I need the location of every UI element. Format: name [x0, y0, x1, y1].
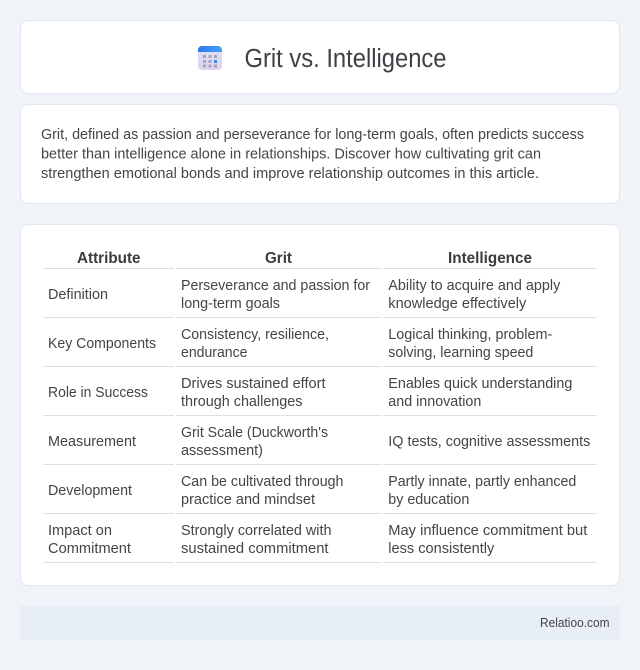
row: Impact on Commitment: less consistently [388, 541, 495, 557]
row: Impact on Commitment [43, 523, 597, 563]
row: Role in Success: and innovation [388, 394, 481, 410]
row: Development [43, 474, 597, 514]
panel: description card [20, 104, 620, 204]
row: Definition: Definition [48, 287, 108, 303]
row: Key Components: Key Components [48, 336, 156, 352]
panel: header card [20, 20, 620, 94]
row: Measurement: IQ tests, cognitive assessments [388, 434, 590, 450]
row: Development: by education [388, 492, 469, 508]
table header row [43, 250, 597, 269]
row: Role in Success: through challenges [181, 394, 302, 410]
row: Measurement: Measurement [48, 434, 136, 450]
row: Impact on Commitment: sustained commitment [181, 541, 328, 557]
row: Development: Partly innate, partly enhanced [388, 474, 576, 490]
row: Impact on Commitment: Commitment [48, 541, 131, 557]
row: Measurement: assessment) [181, 443, 263, 459]
icon: calendar [198, 46, 222, 70]
row: Role in Success: Drives sustained effort [181, 376, 326, 392]
row: Measurement [43, 425, 597, 465]
row: Development: Can be cultivated through [181, 474, 344, 490]
row: Role in Success [43, 376, 597, 416]
row: Definition: Perseverance and passion for [181, 278, 370, 294]
row: Definition: knowledge effectively [388, 296, 527, 312]
table header row: Attribute [77, 250, 141, 267]
row: Key Components: solving, learning speed [388, 345, 533, 361]
row: Key Components: Logical thinking, problem- [388, 327, 553, 343]
description text: better than intelligence alone in relationships. Discover how cultivating grit can [41, 146, 541, 162]
row: Definition [43, 278, 597, 318]
row: Impact on Commitment: Strongly correlated with [181, 523, 332, 539]
row: Key Components: Consistency, resilience, [181, 327, 329, 343]
description text [41, 126, 584, 182]
row: Definition: Ability to acquire and apply [388, 278, 561, 294]
description text: strengthen emotional bonds and improve relationship outcomes in this article. [41, 165, 539, 182]
footer text: Relatioo.com [540, 616, 610, 630]
row: Development: Development [48, 483, 132, 499]
row: Measurement: Grit Scale (Duckworth's [181, 425, 328, 441]
table header row: Grit [265, 250, 293, 267]
row: Role in Success: Role in Success [48, 385, 148, 401]
row: Key Components: endurance [181, 345, 248, 361]
row: Development: practice and mindset [181, 492, 315, 508]
panel: comparison table card [20, 224, 620, 586]
table header row: Intelligence [448, 250, 532, 267]
description text: Grit, defined as passion and perseverance for long-term goals, often predicts success [41, 126, 584, 143]
row: Impact on Commitment: May influence commitment but [388, 523, 587, 539]
row: Impact on Commitment: Impact on [48, 523, 112, 539]
row: Role in Success: Enables quick understanding [388, 376, 572, 392]
title: Grit vs. Intelligence [244, 45, 446, 73]
row: Definition: long-term goals [181, 296, 280, 312]
row: Key Components [43, 327, 597, 367]
footer [20, 606, 620, 640]
